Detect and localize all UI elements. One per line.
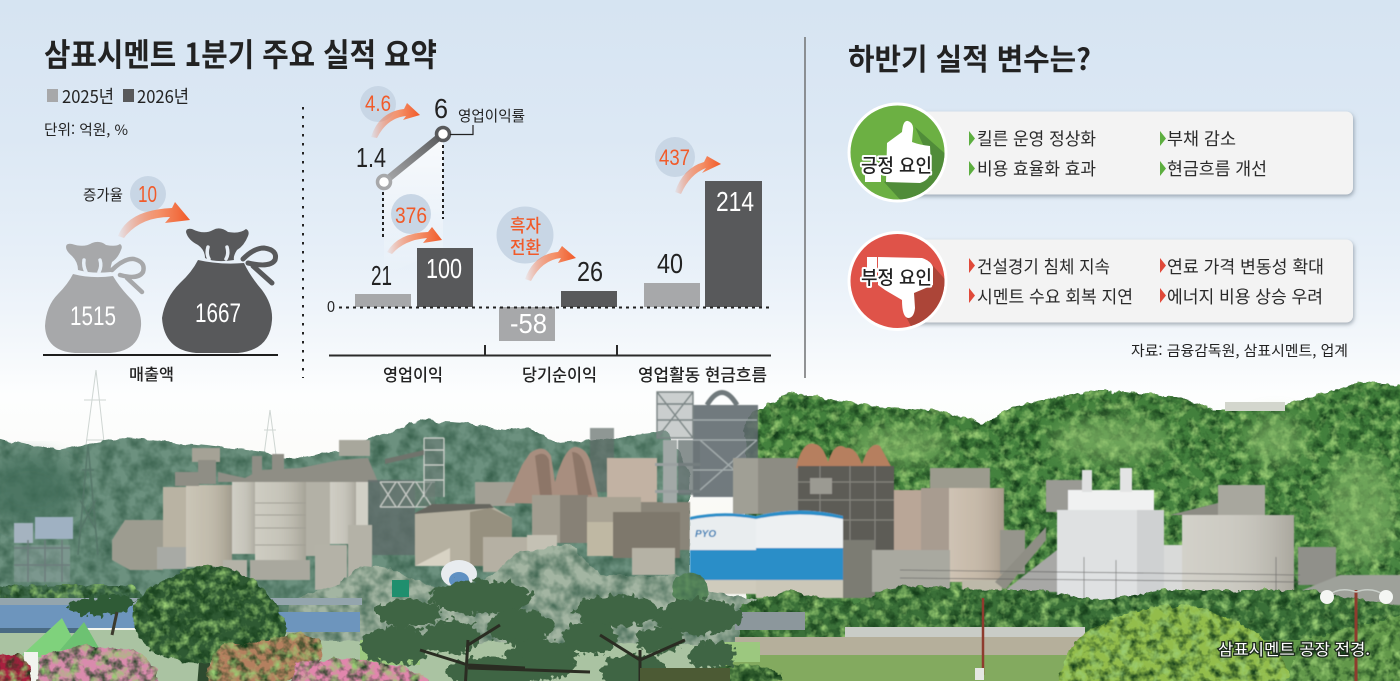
bar values: 21 <box>371 260 392 291</box>
power lines <box>900 557 1300 600</box>
dotted separator <box>302 107 304 378</box>
icon: 2026 money bag: 1667 <box>195 298 241 328</box>
growth badge: 10 <box>138 181 157 207</box>
tall tower <box>655 392 758 503</box>
pale lower plant towers <box>223 525 372 600</box>
vertical divider <box>804 37 806 378</box>
callout: operating profit growth <box>387 194 442 254</box>
blue cement tanks <box>690 510 843 598</box>
unit note: 단위: 억원, % <box>44 119 128 140</box>
plant-side tree line <box>740 585 1400 650</box>
bright green tree <box>1056 606 1295 681</box>
revenue baseline <box>43 354 278 356</box>
silo top machinery <box>175 440 378 486</box>
darker left woods <box>0 455 75 525</box>
mid buildings <box>483 495 690 575</box>
icon: thumbs down badge: 부정 요인 <box>861 263 932 290</box>
silos <box>157 478 368 569</box>
callout: cash flow growth <box>655 137 721 194</box>
green lawn patches <box>360 640 760 665</box>
icon: thumbs down badge <box>848 231 950 335</box>
margin line: 1.4 <box>356 142 386 173</box>
category axis: 영업이익 <box>383 361 443 386</box>
bar values: 26 <box>577 256 603 287</box>
legend <box>47 83 189 109</box>
hill light patches <box>850 415 1396 565</box>
revenue label: 매출액 <box>129 361 174 385</box>
legend: 2026년 <box>137 83 189 109</box>
pylon <box>78 445 98 555</box>
distant pylons <box>84 370 278 470</box>
category axis: 당기순이익 <box>522 361 597 386</box>
rear pale silo <box>607 458 657 502</box>
plant structures left <box>14 392 758 600</box>
icon: thumbs up badge <box>848 102 950 205</box>
conveyor slope and cone <box>995 527 1057 592</box>
bullets: 킬른 운영 정상화 <box>977 126 1096 151</box>
right foreground foliage <box>1280 610 1400 681</box>
steel frame and conveyor <box>368 438 444 555</box>
bar values: -58 <box>510 308 547 339</box>
side structure <box>112 520 163 570</box>
lamp posts <box>975 590 1393 681</box>
bullets: 현금흐름 개선 <box>1167 156 1267 181</box>
card <box>900 112 1353 194</box>
photo caption: 삼표시멘트 공장 전경. <box>1218 636 1370 660</box>
heading: second half variables: 하반기 실적 변수는? <box>848 35 1091 79</box>
cyclones <box>505 428 614 505</box>
bullets: 연료 가격 변동성 확대 <box>1167 254 1324 279</box>
bar values: 40 <box>657 248 683 279</box>
small pine <box>67 596 138 615</box>
bullets: 비용 효율화 효과 <box>977 156 1096 181</box>
orange shrubs <box>207 633 322 681</box>
icon: 2025 money bag: 1515 <box>70 301 116 331</box>
bars <box>355 181 762 341</box>
bullets <box>969 254 1324 309</box>
source note: 자료: 금융감독원, 삼표시멘트, 업계 <box>1131 340 1348 361</box>
white tower <box>1046 468 1184 602</box>
blue cement tanks: PYO <box>695 529 716 540</box>
category axis: 영업활동 현금흐름 <box>638 361 767 386</box>
bullets: 시멘트 수요 회복 지연 <box>977 284 1133 309</box>
grass <box>725 655 1100 681</box>
panel: revenue money bags <box>43 176 278 385</box>
callout: margin change <box>360 86 420 138</box>
callout: turned to profit: 흑자 <box>510 212 541 238</box>
margin glow <box>384 133 443 275</box>
callout: cash flow growth: 437 <box>659 145 690 170</box>
callout: operating profit growth: 376 <box>395 203 427 228</box>
bar values: 214 <box>716 186 754 217</box>
right low buildings <box>1298 547 1400 605</box>
bullets: 건설경기 침체 지속 <box>977 254 1110 279</box>
panel: negative factors <box>848 231 1353 335</box>
bullets: 에너지 비용 상승 우려 <box>1167 284 1323 309</box>
block tower <box>733 458 798 514</box>
right green hill <box>745 382 1400 630</box>
low brown foliage <box>640 668 730 681</box>
far left foliage band <box>0 585 150 603</box>
icon: thumbs up badge: 긍정 요인 <box>861 151 932 178</box>
red azalea <box>0 653 32 681</box>
bridge <box>0 598 362 633</box>
building by tanks <box>843 540 1002 602</box>
left hazy hill <box>0 420 690 620</box>
card <box>900 240 1353 322</box>
green tents <box>22 618 100 681</box>
riverside lawn <box>0 630 760 681</box>
margin line: 6 <box>434 93 448 124</box>
ground under right trees <box>1085 640 1400 681</box>
icon: 2026 money bag <box>162 228 276 353</box>
rust cyclones <box>796 444 892 468</box>
margin line: 영업이익률 <box>458 105 525 126</box>
plant structures right <box>690 444 1400 605</box>
callout: turned to profit <box>496 206 576 281</box>
photo: Sampyo Cement plant <box>0 370 1400 681</box>
pink azaleas middle <box>290 658 446 681</box>
bullets <box>969 126 1267 181</box>
rear silos <box>894 468 1004 582</box>
dark frame <box>798 466 894 550</box>
legend: 2025년 <box>62 83 114 109</box>
panel: positive factors <box>848 102 1353 205</box>
big concrete silo <box>1170 485 1294 593</box>
pine trunks <box>420 625 685 681</box>
lower left bush <box>693 665 783 681</box>
hazy mid trees <box>286 545 760 645</box>
shed building <box>415 482 515 566</box>
tree near tanks <box>672 573 708 607</box>
left small structure <box>14 517 73 582</box>
callout: margin change: 4.6 <box>365 91 391 116</box>
big round tree <box>134 566 286 681</box>
bar values <box>371 186 754 339</box>
callout: turned to profit: 전환 <box>510 234 541 260</box>
category axis <box>329 345 771 386</box>
growth badge <box>130 176 166 212</box>
title: Q1 summary: 삼표시멘트 1분기 주요 실적 요약 <box>44 30 437 76</box>
bar values: 100 <box>426 253 462 284</box>
pine trees <box>361 580 742 681</box>
sign and dome <box>392 560 477 597</box>
margin line <box>356 93 525 238</box>
icon: 2025 money bag <box>45 242 144 353</box>
chart: operating profit, net income, cash flow <box>327 86 772 386</box>
distant white building on hill <box>1225 402 1285 411</box>
house roofs <box>735 612 1085 639</box>
stone embankment <box>735 637 1085 660</box>
growth label: 증가율 <box>83 184 123 205</box>
zero axis: 0 <box>327 299 335 316</box>
bullets: 부채 감소 <box>1167 126 1236 151</box>
pink azaleas left <box>36 645 158 681</box>
arrow: revenue growth <box>118 202 190 238</box>
